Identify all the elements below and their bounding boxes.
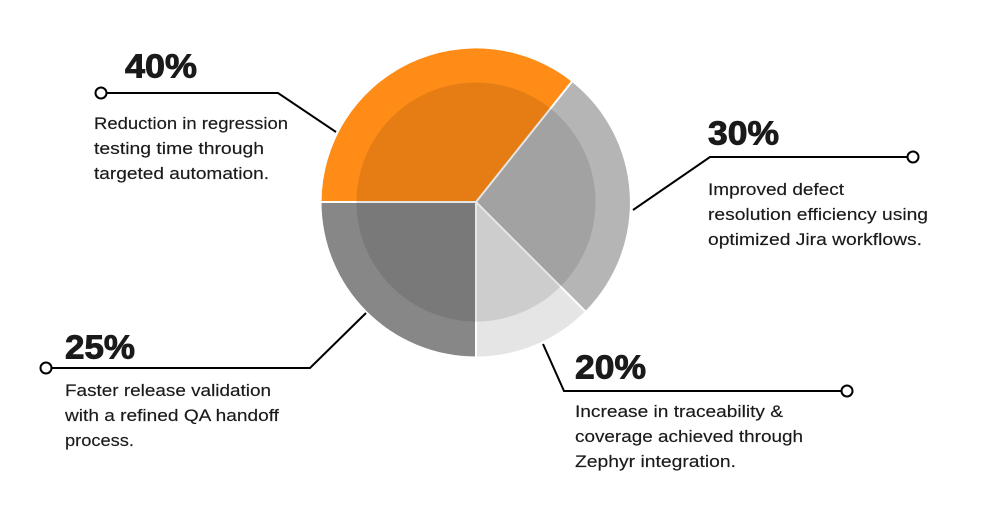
description 25%: with a refined QA handoff (64, 406, 279, 425)
description 20%: coverage achieved through (575, 427, 803, 446)
value 40%: 40% (125, 48, 197, 84)
slice: 30% mid gray (476, 82, 630, 311)
marker dot 30% (908, 152, 918, 162)
callout: 25% (40, 313, 366, 450)
value 30%: 30% (708, 114, 779, 152)
leader line 30% (633, 157, 908, 210)
description 30% (708, 180, 928, 249)
leader line 40% (106, 93, 336, 132)
description 40%: targeted automation. (94, 164, 269, 183)
description 20%: Increase in traceability & (575, 402, 783, 421)
callout: 20% (543, 344, 852, 471)
description 25%: process. (65, 431, 134, 450)
marker dot 25% (40, 362, 52, 374)
description 30%: optimized Jira workflows. (708, 230, 922, 249)
description 20%: Zephyr integration. (575, 452, 736, 471)
description 20% (575, 402, 803, 471)
callout: 30% (633, 114, 928, 249)
description 25%: Faster release validation (65, 381, 271, 400)
slice: 40% orange (322, 48, 572, 202)
leader line 20% (543, 344, 842, 391)
callout: 40% (94, 48, 336, 183)
description 40%: Reduction in regression (94, 114, 288, 133)
marker dot 20% (842, 386, 852, 396)
pie chart (322, 48, 630, 356)
description 30%: resolution efficiency using (708, 205, 928, 224)
description 30%: Improved defect (708, 180, 844, 199)
slice: 25% dark gray (322, 202, 476, 356)
description 40%: testing time through (94, 139, 264, 158)
leader line 25% (51, 313, 366, 368)
value 20%: 20% (575, 348, 646, 386)
inner shaded circle (356, 82, 596, 322)
marker dot 40% (96, 88, 106, 98)
value 25%: 25% (65, 328, 135, 366)
description 25% (64, 381, 279, 450)
slice: 20% light gray (476, 202, 585, 356)
description 40% (94, 114, 288, 183)
